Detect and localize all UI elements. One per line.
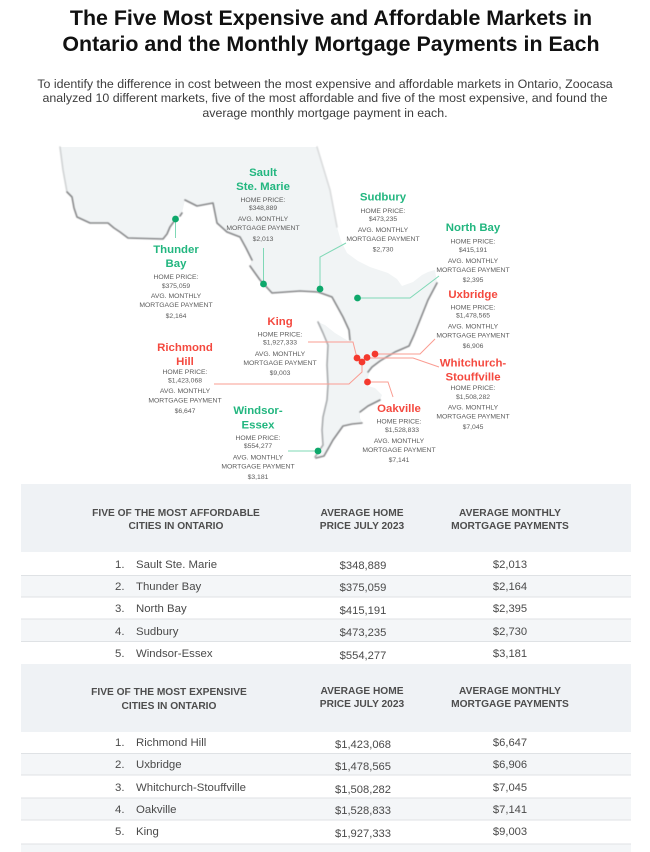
marker: North Bay [354,276,439,301]
table rows: expensive: $1,478,565 [335,761,391,773]
label: King [243,316,317,377]
marker: Sudbury [317,243,346,292]
table rows: expensive: $1,528,833 [335,805,391,817]
label: Sault Ste. Marie: HOME PRICE: [241,197,286,204]
table rows: affordable: Sudbury [136,626,179,638]
table header: affordable: FIVE OF THE MOST AFFORDABLE [92,508,260,519]
label: King: HOME PRICE: [258,332,303,338]
label: Sault Ste. Marie: AVG. MONTHLY [238,216,289,223]
label: Sudbury: Sudbury [360,192,407,204]
table rows: affordable: Windsor-Essex [136,648,213,660]
table rows: affordable: 2. [115,581,124,593]
marker: Uxbridge [372,339,435,357]
table rows: affordable: $348,889 [340,560,386,572]
table header: expensive [21,664,631,732]
table rows: expensive: $9,003 [493,826,527,838]
table header: expensive: MORTGAGE PAYMENTS [451,699,569,710]
table rows: affordable: North Bay [136,603,187,615]
label: Whitchurch-Stouffville: Whitchurch- [440,358,506,370]
table rows: affordable: Thunder Bay [136,581,202,593]
label: Windsor-Essex: AVG. MONTHLY [233,454,284,462]
marker: Thunder Bay [172,216,179,238]
label: Oakville: $7,141 [389,457,410,464]
table rows: expensive: $6,647 [493,737,527,749]
label: Sault Ste. Marie: Ste. Marie [236,181,290,193]
label: Uxbridge: Uxbridge [448,289,498,301]
label: Uxbridge: MORTGAGE PAYMENT [436,332,510,340]
label: Thunder Bay: MORTGAGE PAYMENT [139,302,213,309]
label: Whitchurch-Stouffville [436,358,510,431]
label: North Bay: $2,395 [463,277,484,284]
table header: expensive: PRICE JULY 2023 [320,699,405,710]
label: Thunder Bay: Bay [166,258,187,270]
table rows: affordable: 5. [115,648,124,660]
table rows: affordable: $2,730 [493,626,527,638]
table header: expensive: FIVE OF THE MOST EXPENSIVE [91,687,247,698]
label: Sault Ste. Marie: $348,889 [249,205,277,212]
intro paragraph: average monthly mortgage payment in each. [202,106,448,120]
label: Whitchurch-Stouffville: Stouffville [445,372,501,384]
label: Sudbury: MORTGAGE PAYMENT [346,236,420,243]
table rows: expensive: King [136,826,159,838]
table rows: expensive: Oakville [136,804,177,816]
label: King: MORTGAGE PAYMENT [243,360,317,367]
marker: Sault Ste. Marie [260,248,267,287]
label: Sault Ste. Marie: $2,013 [253,236,274,243]
label: Richmond Hill: $1,423,068 [168,378,202,384]
label: Sudbury [346,192,420,254]
label: Uxbridge: $1,478,565 [456,312,490,320]
marker: Richmond Hill [214,359,365,384]
label: Richmond Hill: AVG. MONTHLY [160,388,211,395]
table header: affordable: MORTGAGE PAYMENTS [451,521,569,532]
label: Whitchurch-Stouffville: AVG. MONTHLY [448,404,499,412]
label: King: $1,927,333 [263,340,297,346]
table rows: affordable: $3,181 [493,648,527,660]
label: Richmond Hill [148,342,222,415]
table rows: affordable: $554,277 [340,650,386,662]
label: Thunder Bay: $375,059 [162,283,190,290]
table rows: expensive [21,737,631,852]
title: The Five Most Expensive and Affordable Markets in [70,6,592,30]
table rows: expensive: Whitchurch-Stouffville [136,782,246,794]
label: Uxbridge: $6,906 [463,343,484,350]
label: Windsor-Essex: MORTGAGE PAYMENT [221,464,295,470]
label: Whitchurch-Stouffville: $1,508,282 [456,394,490,401]
table header: affordable: AVERAGE MONTHLY [459,508,561,519]
table header: affordable [21,484,631,552]
label: Sudbury: HOME PRICE: [361,208,406,215]
table rows: affordable: 4. [115,626,124,638]
label: Thunder Bay [139,244,213,320]
label: Whitchurch-Stouffville: MORTGAGE PAYMENT [436,414,510,420]
label: Richmond Hill: Hill [176,356,194,368]
label: Richmond Hill: Richmond [157,342,213,354]
label: Whitchurch-Stouffville: HOME PRICE: [451,385,496,392]
label: North Bay: MORTGAGE PAYMENT [436,267,510,274]
label: Uxbridge: AVG. MONTHLY [448,324,499,330]
label: Sudbury: $2,730 [373,246,394,254]
label: Uxbridge: HOME PRICE: [451,304,496,312]
marker: Windsor-Essex [288,448,321,454]
label: Windsor-Essex [221,405,295,481]
label: Windsor-Essex: $554,277 [244,443,272,450]
label: North Bay: HOME PRICE: [451,238,496,246]
label: Richmond Hill: MORTGAGE PAYMENT [148,398,222,404]
table header: expensive: AVERAGE HOME [320,686,404,697]
label: Oakville: HOME PRICE: [377,418,422,426]
table rows: expensive: $1,508,282 [335,784,391,796]
label: Sudbury: AVG. MONTHLY [358,227,409,234]
label: Oakville: AVG. MONTHLY [374,438,425,445]
label: Whitchurch-Stouffville: $7,045 [463,424,484,431]
label: Sault Ste. Marie: MORTGAGE PAYMENT [226,225,300,232]
label: King: King [267,316,293,328]
label: Sault Ste. Marie: Sault [249,167,277,179]
table rows: expensive: 1. [115,737,124,749]
table rows: expensive: Uxbridge [136,759,182,771]
table rows: expensive: 3. [115,782,124,794]
intro paragraph [37,77,613,120]
title [62,6,600,56]
table rows: expensive: 5. [115,826,124,838]
intro paragraph: analyzed 10 different markets, five of the most affordable and five of the most expensive, and found the [42,91,608,105]
label: Oakville: $1,528,833 [385,427,419,434]
label: Windsor-Essex: Windsor- [233,405,283,417]
label: Windsor-Essex: Essex [242,420,275,432]
table header: expensive: AVERAGE MONTHLY [459,686,561,697]
table rows: affordable: $375,059 [340,582,386,594]
table rows: expensive: $7,141 [493,804,527,816]
marker: Whitchurch-Stouffville [364,354,439,367]
table rows: affordable [21,559,631,662]
label: Windsor-Essex: $3,181 [248,474,269,481]
table rows: expensive: 4. [115,804,124,816]
table rows: expensive: $1,423,068 [335,739,391,751]
label: Richmond Hill: $6,647 [175,408,196,415]
table rows: affordable: $2,395 [493,603,527,615]
label: Thunder Bay: HOME PRICE: [154,274,199,281]
table header: affordable: PRICE JULY 2023 [320,521,405,532]
label: Oakville [362,403,436,464]
label: North Bay [436,222,510,284]
label: Thunder Bay: AVG. MONTHLY [151,293,202,300]
title: Ontario and the Monthly Mortgage Payments in Each [62,32,600,56]
table rows: affordable: 3. [115,603,124,615]
table rows: expensive: $1,927,333 [335,828,391,840]
label: Thunder Bay: Thunder [153,244,199,256]
table header: affordable: AVERAGE HOME [320,508,404,519]
label: Oakville: Oakville [377,403,421,415]
label: Sault Ste. Marie [226,167,300,243]
table header: affordable: CITIES IN ONTARIO [129,521,224,532]
label: Uxbridge [436,289,510,350]
table rows: expensive: $6,906 [493,759,527,771]
label: Sudbury: $473,235 [369,216,397,223]
table rows: expensive: 2. [115,759,124,771]
table rows: affordable: $473,235 [340,627,386,639]
table: most affordable cities [21,484,631,662]
label: King: $9,003 [270,370,291,377]
table rows: affordable: Sault Ste. Marie [136,559,217,571]
table header: expensive: CITIES IN ONTARIO [122,701,217,712]
label: Thunder Bay: $2,164 [166,313,187,320]
intro paragraph: To identify the difference in cost between the most expensive and affordable markets in Ontario, Zoocasa [37,77,613,91]
label: North Bay: $415,191 [459,247,487,254]
table rows: expensive: $7,045 [493,782,527,794]
table: most expensive cities [21,664,631,852]
marker: Oakville [364,379,393,397]
table rows: expensive: Richmond Hill [136,737,206,749]
label: Oakville: MORTGAGE PAYMENT [362,447,436,454]
table rows: affordable: $2,164 [493,581,527,593]
label: Richmond Hill: HOME PRICE: [163,369,208,376]
label: Windsor-Essex: HOME PRICE: [236,435,281,442]
label: North Bay: AVG. MONTHLY [448,258,499,265]
table rows: affordable: $415,191 [340,605,386,617]
label: King: AVG. MONTHLY [255,351,306,358]
table rows: affordable: 1. [115,559,124,571]
table rows: affordable: $2,013 [493,559,527,571]
map of Ontario [60,147,437,458]
marker: King [308,342,360,361]
label: North Bay: North Bay [446,222,501,234]
